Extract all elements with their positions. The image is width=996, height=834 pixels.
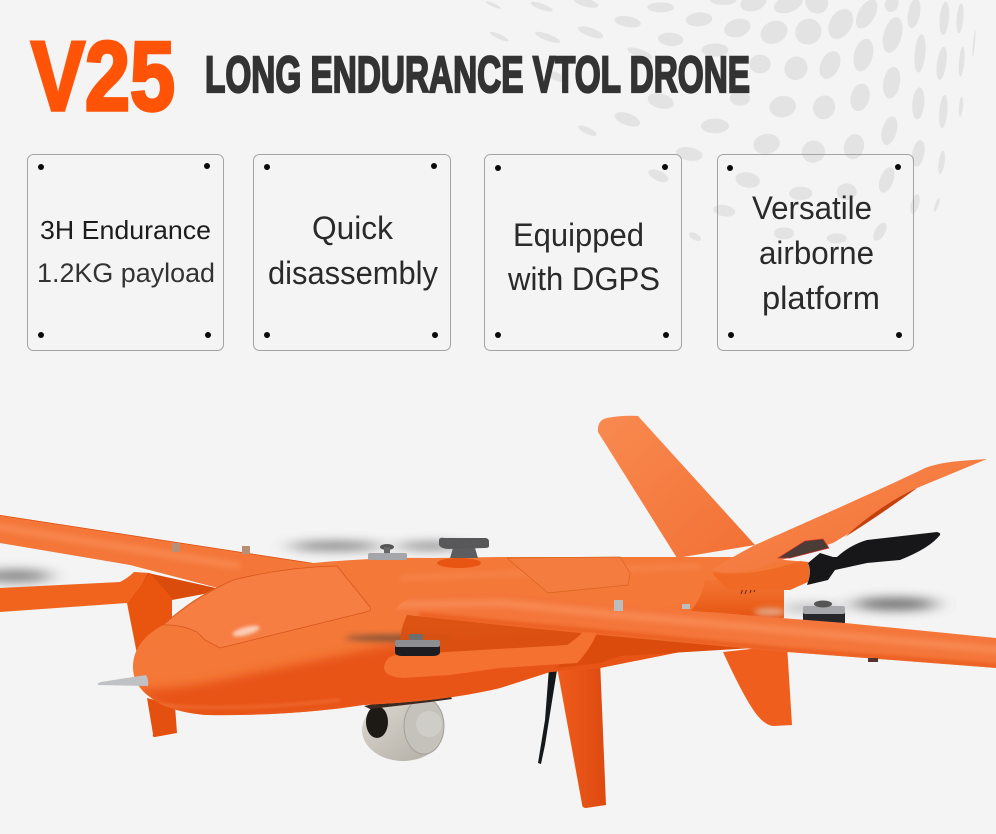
antenna — [538, 668, 557, 764]
tail wing — [712, 459, 987, 572]
panel: versatile airborne platform: platform — [762, 280, 880, 316]
rear fuselage shading — [690, 570, 808, 618]
drone illustration — [0, 416, 996, 808]
GPS antenna — [439, 538, 489, 558]
panel: versatile airborne platform — [718, 154, 914, 350]
camera gimbal — [362, 698, 444, 761]
rotor blur: far left — [0, 569, 51, 583]
near motor — [395, 634, 440, 656]
panel: equipped with DGPS — [484, 154, 682, 350]
gimbal mount — [364, 695, 452, 709]
wing posts — [614, 600, 690, 611]
panel: quick disassembly — [254, 154, 450, 350]
far rear motor — [368, 544, 407, 560]
GPS antenna base — [437, 558, 481, 568]
background dot pattern — [485, 0, 976, 243]
far wing boom rear strut — [130, 573, 225, 605]
dark area below wing root — [400, 615, 600, 656]
lower rear fin — [723, 645, 792, 726]
motor prop streak — [345, 634, 455, 642]
panel: quick disassembly: Quick — [312, 210, 394, 246]
small far wing posts — [172, 543, 250, 554]
canopy highlight — [231, 624, 261, 638]
far landing strut — [127, 573, 172, 654]
near wing boom — [384, 632, 597, 678]
panel: quick disassembly: disassembly — [268, 255, 438, 291]
title: V25: V25 — [31, 21, 175, 131]
fuselage — [133, 557, 808, 716]
tail control linkage — [778, 539, 829, 558]
near wing underside post — [868, 658, 878, 662]
tail wing underside shadow — [845, 488, 917, 537]
upper vertical fin — [598, 416, 755, 558]
panel: equipped with DGPS: with DGPS — [507, 261, 660, 297]
panel: versatile airborne platform: Versatile — [752, 190, 872, 226]
nose landing fin — [147, 698, 177, 737]
tail motor hub — [803, 600, 845, 624]
far wing — [0, 515, 313, 588]
near wing — [396, 598, 996, 668]
rear body hatch — [507, 557, 630, 593]
panel: equipped with DGPS: Equipped — [513, 217, 644, 253]
tail boom tip — [712, 561, 810, 590]
dark wing underside strut — [557, 633, 753, 668]
canopy hatch — [163, 566, 370, 648]
panel: endurance and payload: 3H Endurance — [40, 215, 211, 245]
panel: endurance and payload — [28, 154, 224, 350]
rotor blur: rear far motor — [289, 541, 464, 551]
tail motor and propeller — [807, 532, 940, 585]
near main landing fin — [557, 660, 606, 808]
pitot tube — [98, 675, 148, 686]
body ventilation marks — [741, 586, 756, 594]
panel: versatile airborne platform: airborne — [759, 235, 874, 271]
rear rotor haze — [754, 608, 786, 616]
panel: endurance and payload: 1.2KG payload — [37, 258, 215, 288]
far wing boom — [0, 572, 150, 612]
rotor blur: tail motor — [782, 597, 937, 613]
